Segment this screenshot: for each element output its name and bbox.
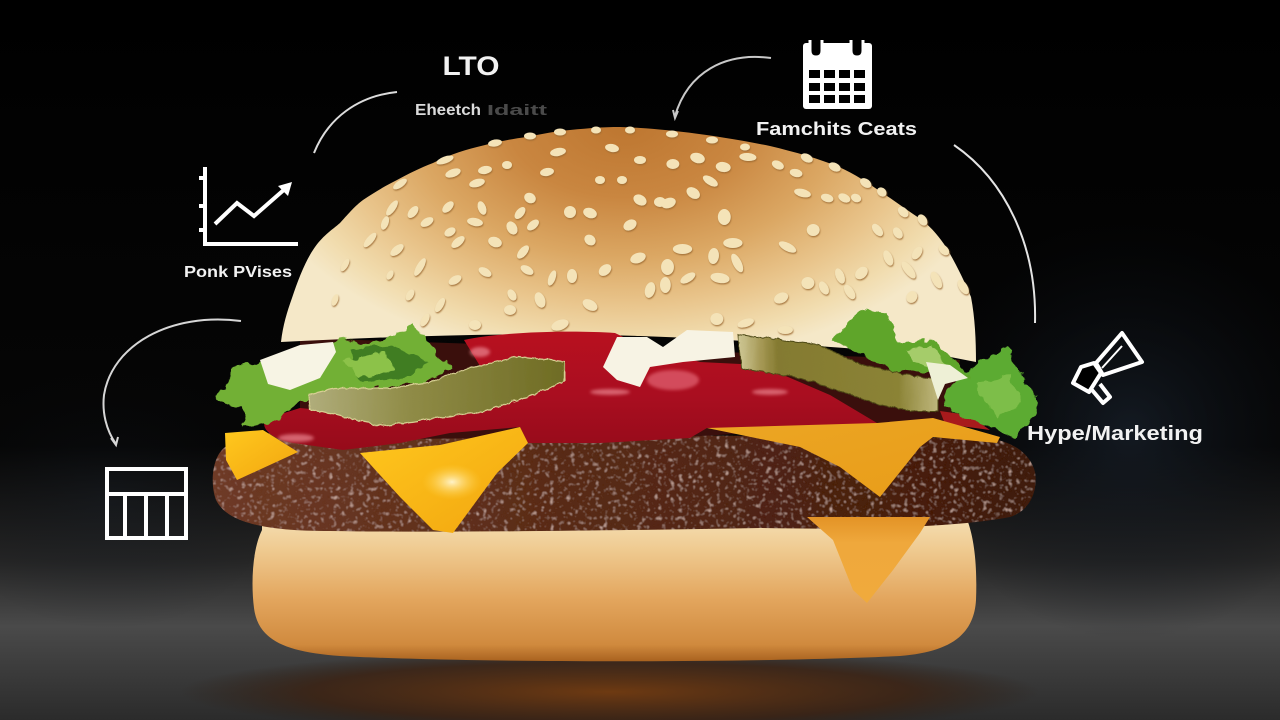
mayo center xyxy=(603,330,735,387)
patty xyxy=(213,432,1036,532)
callout: LTO xyxy=(415,51,547,119)
mayo left xyxy=(260,342,336,390)
label: pork prices: Ponk PVises xyxy=(184,264,292,281)
cheese shine xyxy=(422,464,482,500)
icon: megaphone xyxy=(1073,333,1142,403)
lettuce left xyxy=(217,323,452,428)
callout: LTO: LTO xyxy=(442,51,500,81)
dark backing between bun and patty xyxy=(300,338,960,440)
lower cheese xyxy=(807,517,930,603)
left cheese flap xyxy=(225,430,298,480)
lettuce right xyxy=(943,348,1037,437)
callout: LTO: Eheetch xyxy=(415,102,481,119)
icon: growth chart xyxy=(199,167,298,244)
arrow: right arc xyxy=(954,145,1035,323)
top bun xyxy=(281,127,976,362)
icon: calendar xyxy=(803,40,872,109)
arrow: calendar arc xyxy=(673,57,771,118)
right cheese flap xyxy=(707,418,1000,497)
icon: table xyxy=(107,469,186,538)
sauce xyxy=(264,332,877,450)
burger xyxy=(213,126,1037,661)
center cheese flap xyxy=(360,427,528,533)
callout: LTO: Idaitt xyxy=(487,102,547,119)
lettuce upper right xyxy=(833,310,970,380)
sesame seeds xyxy=(330,126,971,334)
pickle left xyxy=(307,355,563,425)
arrow: LTO arc xyxy=(314,92,397,153)
arrow: left arc xyxy=(104,320,241,445)
mayo right xyxy=(926,362,968,400)
pickle right xyxy=(737,333,937,410)
label: hype marketing: Hype/Marketing xyxy=(1027,423,1203,445)
bottom bun xyxy=(253,522,976,661)
sauce highlights xyxy=(278,347,788,442)
sauce right sliver xyxy=(940,411,990,430)
label: franchise costs: Famchits Ceats xyxy=(756,119,917,139)
